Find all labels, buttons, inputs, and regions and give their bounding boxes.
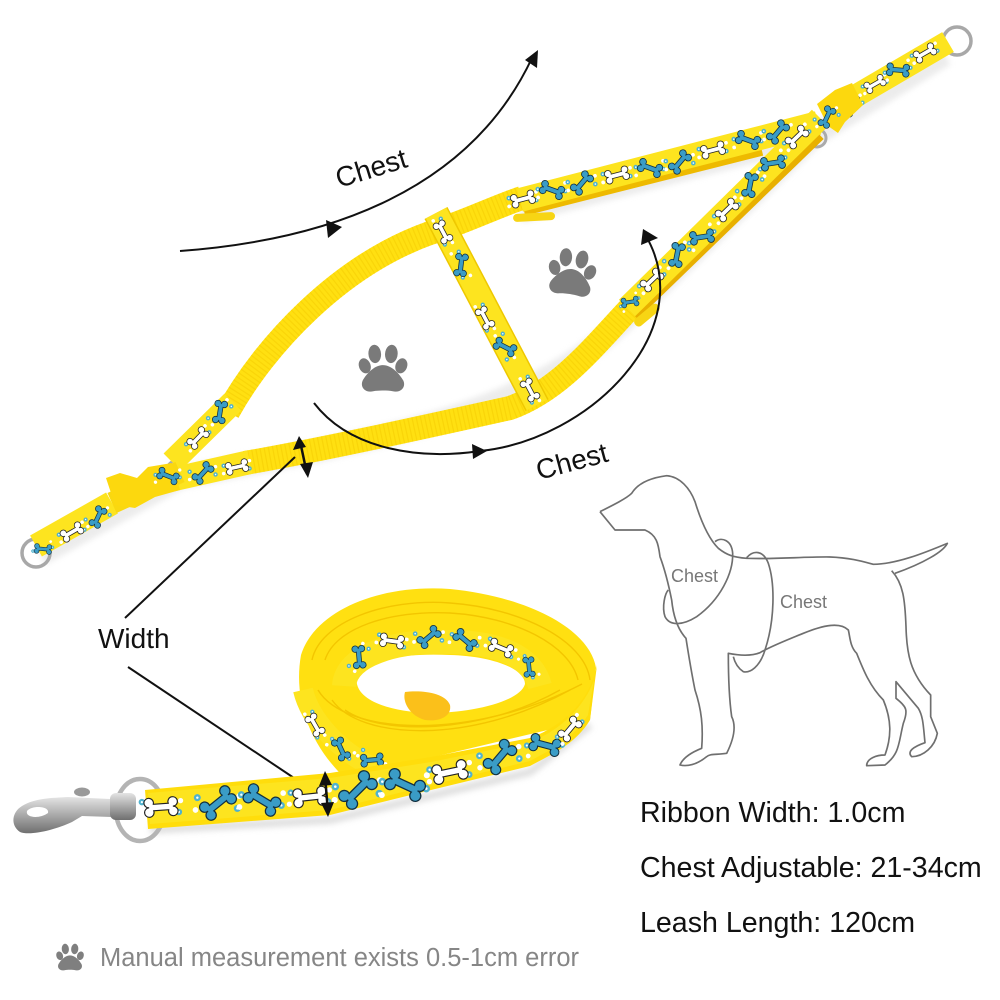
neck strap loop [664,539,733,624]
leash coil body [299,588,596,778]
leash coil layering lines [312,602,590,731]
harness shadow [40,55,945,555]
label: chest bottom: Chest [533,437,611,486]
middle rings [167,129,826,479]
chest strap loop [733,552,773,672]
leash inner printed ring [341,623,546,686]
leash width arrow [319,771,334,817]
d-ring bottom [22,539,50,567]
leash handle loop [404,691,450,720]
paw print upper [545,246,599,298]
d-ring top [943,27,971,55]
chest arrow top [180,50,538,251]
spec: leash length: Leash Length: 120cm [640,907,915,939]
leash [13,588,597,841]
spec: ribbon width: Ribbon Width: 1.0cm [640,797,905,829]
dog label: body chest: Chest [780,592,827,612]
slider tabs [513,212,661,328]
buckle top [808,83,863,134]
leash shadow [150,725,590,830]
nylon strap upper [228,198,522,412]
harness [22,27,971,567]
spec: chest adjustable: Chest Adjustable: 21-34cm [640,852,982,884]
printed strap lower left lower branch [170,457,253,488]
printed strap bottom end [28,472,180,563]
width callout [98,436,313,790]
nylon strap lower [245,308,630,463]
leash front strip [137,665,597,829]
label: chest top: Chest [332,143,411,194]
dog label: neck chest: Chest [671,566,718,586]
paw print lower [359,345,407,392]
icon: footnote paw [56,944,84,970]
snap hook [13,779,164,841]
printed strap right diagonal [615,118,820,317]
footnote: Manual measurement exists 0.5-1cm error [100,944,580,972]
printed strap top right [505,116,818,210]
dog outline [600,476,947,766]
leash left printed edge [301,690,391,778]
width callout: Width [98,623,170,654]
chest arrow bottom [314,229,660,459]
center strap [430,213,543,407]
printed strap lower left upper branch [172,393,239,462]
printed strap top end [825,40,948,123]
buckle bottom [106,462,185,508]
dog body [600,476,947,766]
